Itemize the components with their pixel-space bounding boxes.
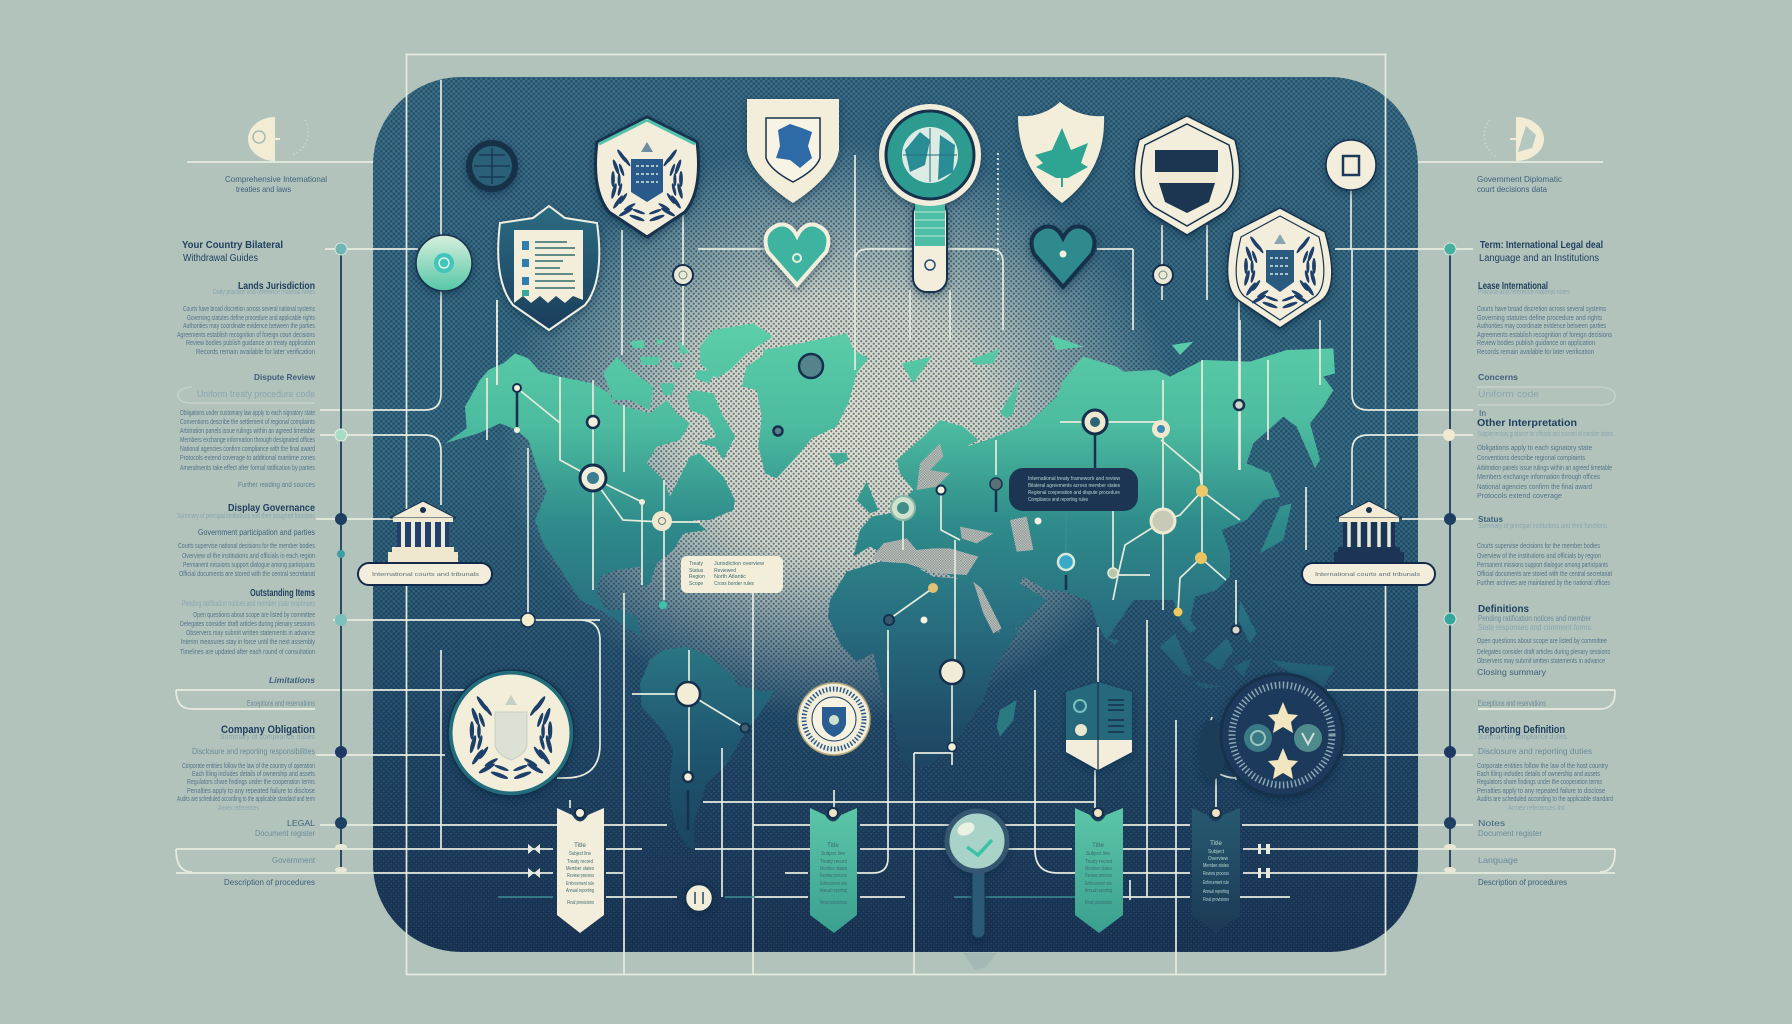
text: right definitions block: Delegates consider draft articles during plenary sessions [1477, 647, 1610, 656]
text: right international block: Review bodies publish guidance on application [1477, 338, 1595, 347]
text: right obligations block: Each filing includes details of ownership and assets [1477, 769, 1600, 778]
callout: cream map note: Region [689, 574, 705, 580]
connector lines [176, 54, 1615, 975]
text: right definitions block [1477, 604, 1610, 677]
text: left dispute block: Uniform treaty procedure code [197, 389, 315, 399]
text: left display governance block: Display Governance [228, 503, 315, 514]
text: left footer notes: Description of procedures [224, 877, 315, 887]
text: left outstanding block [180, 588, 315, 656]
text: right status block: Permanent missions support dialogue among participants [1477, 560, 1608, 569]
text: left footer notes: LEGAL [287, 818, 315, 828]
callout: cream map note: Reviewed [714, 568, 736, 574]
icon: half seal left [248, 117, 308, 161]
tag: teal left [810, 808, 857, 933]
text: right column header [1477, 174, 1563, 194]
map: South America [640, 647, 775, 850]
text: left jurisdiction block: Authorities may coordinate evidence between the parties [183, 321, 315, 330]
text: left outstanding block: Observers may submit written statements in advance [186, 628, 315, 637]
text: left company obligation block: Regulators share findings under the cooperation terms [187, 777, 315, 786]
map: islands [857, 335, 1335, 688]
icon: round stamp [798, 683, 870, 755]
tag: teal right: Subject line [1086, 851, 1110, 857]
text: left jurisdiction block [177, 281, 315, 356]
text: right international block: Agreements establish recognition of foreign decisions [1477, 330, 1612, 339]
text: right concerns block: Other Interpretation [1477, 418, 1577, 429]
callout: cream map note: Treaty [689, 561, 703, 567]
text: right concerns block: Concerns [1478, 372, 1518, 382]
text: right heading: Language and an Institutions [1479, 253, 1599, 264]
tag: cream: Review process [567, 873, 594, 879]
map pins [513, 354, 1244, 782]
text: left dispute block: Conventions describe the settlement of regional complaints [180, 417, 315, 426]
map: Eurasia and Africa [828, 335, 1335, 770]
text: left jurisdiction block: Records remain available for later verification [196, 347, 315, 356]
text: right international block: Governing statutes define procedure and rights [1477, 313, 1602, 322]
callout: dark map note: Compliance and reporting rules [1028, 497, 1088, 503]
tag: dark: Review process [1203, 871, 1229, 877]
text: right heading [1479, 240, 1603, 264]
text: left jurisdiction block: Courts have broad discretion across several national systems [183, 304, 315, 313]
tag: teal left: Subject line [821, 851, 845, 857]
text: right footer notes: Notes [1478, 818, 1505, 828]
tag: cream: Final provisions [567, 900, 594, 906]
text: left limitations: Exceptions and reservations [247, 699, 315, 708]
tag: cream: Treaty record [567, 859, 593, 865]
text: left heading: Your Country Bilateral [182, 240, 283, 251]
text: left display governance block: Official documents are stored with the central secretariat [179, 569, 316, 578]
text: right status block: Summary of principal institutions and their functions [1478, 523, 1607, 530]
pills [176, 690, 1615, 872]
text: right definitions block: Observers may submit written statements in advance [1477, 656, 1605, 665]
map: Iceland [828, 453, 848, 466]
text: right status block: Overview of the institutions and officials by region [1477, 551, 1601, 560]
text: right definitions block: State responses and comment forms [1478, 623, 1591, 632]
text: left dispute block: National agencies confirm compliance with the final award [180, 444, 315, 453]
text: right definitions block: Pending ratification notices and member [1478, 614, 1591, 623]
outer frame [406, 54, 1386, 974]
text: right definitions block: Open questions about scope are listed by committee [1477, 636, 1607, 645]
text: right footer notes: Language [1478, 855, 1518, 865]
text: left outstanding block: Pending ratification notices and member state responses [182, 599, 315, 608]
tag: dark [1192, 808, 1240, 933]
text: right footer notes: Description of procedures [1478, 877, 1567, 887]
tag: cream: Annual reporting [566, 888, 594, 894]
text: left outstanding block: Delegates consider draft articles during plenary sessions [180, 619, 315, 628]
text: left company obligation block: Annex references [218, 805, 259, 812]
text: right heading: Term: International Legal deal [1480, 240, 1603, 251]
icon: bottom node [685, 884, 713, 912]
text: right concerns block: Protocols extend coverage [1477, 491, 1562, 500]
callout: dark map note: International treaty framework and review [1028, 476, 1120, 482]
text: right international block: Authorities may coordinate evidence between parties [1477, 321, 1606, 330]
tag: teal right: Annual reporting [1085, 888, 1112, 894]
text: right definitions block: Closing summary [1477, 667, 1547, 677]
text: left dispute block: Arbitration panels issue rulings within an agreed timetable [180, 426, 315, 435]
icon: laurel seal [448, 670, 574, 796]
text: left jurisdiction block: Daily practice and reference material notes [213, 289, 315, 296]
icon: half seal right [1484, 117, 1544, 161]
text: right international block: Practice and reference material notes [1478, 289, 1570, 296]
icon: dark heart [1032, 226, 1094, 287]
text: right footer notes: Document register [1478, 828, 1542, 838]
tag: cream: Member states [566, 866, 594, 872]
callout: cream map note: Jurisdiction overview [714, 561, 764, 567]
text: left dispute block: Further reading and sources [238, 482, 315, 489]
icon: star badge [1198, 674, 1343, 796]
text: right obligations block: Regulators share findings under the cooperation terms [1477, 777, 1602, 786]
tag: teal left: Member states [820, 866, 847, 872]
text: right concerns block: Members exchange information through offices [1477, 472, 1600, 481]
text: left company obligation block: Each filing includes details of ownership and assets [192, 769, 315, 778]
vertical connectors [497, 150, 1352, 975]
text: right concerns block: Obligations apply to each signatory state [1477, 443, 1592, 452]
icon: document shield [498, 206, 599, 330]
text: left heading: Withdrawal Guides [183, 253, 258, 264]
tag: teal right: Treaty record [1085, 859, 1112, 865]
tag: cream: Subject line [569, 851, 591, 857]
text: left company obligation block: Penalties apply to any repeated failure to disclose [187, 786, 315, 795]
text: left footer notes: Government [272, 855, 316, 865]
panel: world map board [373, 77, 1418, 952]
thick dark connectors [517, 392, 1095, 830]
text: left display governance block: Permanent missions support dialogue among participants [183, 560, 315, 569]
label pill left: International courts and tribunals [372, 572, 480, 578]
icon: mint seal button [416, 235, 472, 291]
tag: dark: Enforcement rule [1203, 880, 1229, 886]
arrow markers [528, 844, 1270, 878]
text: left dispute block: Obligations under customary law apply to each signatory state [180, 408, 315, 417]
tag: teal right: Final provisions [1085, 900, 1112, 906]
text: right status block: Courts supervise decisions for the member bodies [1477, 541, 1600, 550]
tag: dark: Overview [1208, 856, 1228, 862]
icon: courthouse right [1334, 501, 1404, 562]
left timeline [335, 243, 347, 873]
text: right international block: Lease International [1478, 281, 1548, 292]
text: right column header: Government Diplomatic [1477, 174, 1563, 184]
icon: maple leaf shield [1018, 102, 1104, 203]
map: Madagascar [997, 700, 1017, 737]
text: left display governance block: Courts supervise national decisions for the member bodies [178, 541, 315, 550]
callout: dark map note: Bilateral agreements across member states [1028, 483, 1120, 489]
icon: small node left [673, 265, 693, 285]
text: left outstanding block: Open questions about scope are listed by committee [193, 610, 315, 619]
text: left limitations: Limitations [269, 675, 315, 685]
text: left outstanding block: Outstanding Items [250, 588, 315, 599]
tag: dark: Title [1210, 841, 1223, 847]
icon: crest shield right [1228, 208, 1332, 328]
tag: dark: Member states [1203, 863, 1229, 869]
callout: cream map note: Scope [689, 581, 703, 587]
grid connectors [176, 80, 1615, 897]
text: right obligations block: Penalties apply to any repeated failure to disclose [1477, 786, 1605, 795]
text: right definitions block: Definitions [1478, 604, 1529, 615]
text: right obligations block: Summary of compliance duties [1478, 734, 1567, 741]
text: left heading [182, 240, 283, 264]
callout: dark map note [1009, 468, 1138, 511]
tag: teal left: Review process [820, 873, 847, 879]
text: left display governance block: Summary of principal institutions and their assigned functions [177, 513, 315, 520]
tag: teal left: Treaty record [820, 859, 847, 865]
text: left column header: Comprehensive International [225, 174, 327, 184]
callout: cream map note [681, 556, 783, 593]
text: left display governance block: Government participation and parties [198, 527, 315, 537]
text: right concerns block: In [1479, 408, 1486, 418]
text: right footer notes [1478, 818, 1567, 887]
text: left dispute block: Amendments take effect after formal ratification by parties [180, 463, 315, 472]
callout: dark map note: Regional cooperation and dispute procedure [1028, 490, 1120, 496]
callout: cream map note: Cross border rules [714, 581, 754, 587]
text: right concerns block: Conventions describe regional complaints [1477, 453, 1585, 462]
tag: teal right: Review process [1085, 873, 1112, 879]
tag: dark: Annual reporting [1203, 889, 1229, 895]
icon: teal heart [766, 224, 828, 285]
text: left outstanding block: Timelines are updated after each round of consultation [180, 647, 315, 656]
text: right international block [1477, 281, 1612, 356]
text: right obligations block: Reporting Definition [1478, 724, 1565, 736]
text: right obligations block: Audits are scheduled according to the applicable standard [1477, 794, 1613, 803]
text: right obligations block [1477, 724, 1613, 812]
text: right concerns block: National agencies confirm the final award [1477, 482, 1592, 491]
label pill left [358, 563, 492, 585]
timeline nodes [1443, 243, 1456, 873]
text: right obligations block: Annex references list [1508, 805, 1565, 812]
text: right international block: Records remain available for later verification [1477, 347, 1594, 356]
tag: teal left: Enforcement rule [820, 881, 847, 887]
text: right status block: Status [1478, 514, 1503, 524]
text: left company obligation block: Corporate entities follow the law of the country of operation [182, 761, 315, 770]
icon: courthouse left [388, 501, 458, 562]
text: left dispute block: Members exchange information through designated offices [180, 435, 315, 444]
icon: crest shield with wreath [596, 117, 698, 237]
icon: square button [1326, 140, 1376, 190]
icon: small node right [1153, 265, 1173, 285]
text: left display governance block: Overview of the institutions and officials in each region [182, 551, 315, 560]
map: North America [445, 353, 735, 637]
text: left column header [225, 174, 327, 194]
map connectors [487, 300, 700, 620]
map: inland seas [872, 443, 1033, 633]
text: right status block [1477, 514, 1613, 587]
tag: teal left: Title [827, 843, 840, 849]
timeline nodes [335, 243, 347, 873]
text: left jurisdiction block: Governing statutes define procedure and applicable rights [187, 313, 315, 322]
text: left jurisdiction block: Agreements establish recognition of foreign court decisions [177, 330, 315, 339]
text: left display governance block [177, 503, 316, 578]
text: left outstanding block: Interim measures stay in force until the next assembly [181, 637, 315, 646]
callout: cream map note: Status [689, 568, 704, 574]
text: left company obligation block [177, 724, 315, 812]
tag: dark: Final provisions [1203, 897, 1229, 903]
text: left company obligation block: Audits are scheduled according to the applicable standard and term [177, 794, 315, 803]
text: right concerns block: Uniform code [1478, 389, 1539, 399]
tag: teal left: Annual reporting [820, 888, 847, 894]
tag: cream [557, 808, 604, 933]
tag: dark: Subject [1208, 849, 1225, 855]
text: left dispute block [180, 372, 315, 489]
icon: shield book [1066, 682, 1132, 770]
text: left footer notes [224, 818, 316, 887]
map: Africa [828, 562, 1020, 770]
text: left dispute block: Protocols extend coverage to additional maritime zones [180, 453, 315, 462]
icon: magnifier check [947, 811, 1007, 938]
map: Arctic islands [603, 323, 773, 460]
text: right concerns block: Arbitration panels issue rulings within an agreed timetable [1477, 463, 1612, 472]
text: left limitations [247, 675, 315, 708]
text: right international block: Courts have broad discretion across several systems [1477, 304, 1606, 313]
tag: cream: Title [574, 843, 587, 849]
text: right obligations block: Disclosure and reporting duties [1478, 746, 1592, 756]
world map [445, 323, 868, 850]
text: right obligations block: Corporate entities follow the law of the host country [1477, 761, 1608, 770]
tag: teal right: Enforcement rule [1085, 881, 1112, 887]
text: right column header: court decisions data [1477, 184, 1547, 194]
text: left dispute block: Dispute Review [254, 372, 315, 382]
icon: pale shield with lion crest [747, 99, 839, 203]
tag: teal right: Title [1092, 843, 1105, 849]
text: left company obligation block: Company Obligation [221, 724, 315, 736]
tag: teal right [1075, 808, 1123, 933]
text: left jurisdiction block: Review bodies publish guidance on treaty application [186, 338, 315, 347]
text: right limitations: Exceptions and reservations [1478, 699, 1546, 708]
tag: teal right: Member states [1085, 866, 1112, 872]
tag: teal left: Final provisions [820, 900, 847, 906]
map: Eurasia [853, 348, 1335, 640]
label pill right: International courts and tribunals [1315, 572, 1421, 578]
tag: cream: Enforcement rule [566, 881, 594, 887]
map: Greenland [742, 333, 868, 478]
text: left footer notes: Document register [255, 828, 315, 838]
label pill right [1302, 563, 1435, 585]
shadow below panel [963, 953, 997, 970]
text: left column header: treaties and laws [236, 184, 291, 194]
text: left company obligation block: Summary of compliance duties [220, 734, 315, 741]
text: right status block: Further archives are maintained by the national offices [1477, 578, 1610, 587]
text: right concerns block [1477, 372, 1613, 500]
callout: cream map note: North Atlantic [714, 574, 747, 580]
icon: magnifier badge [879, 104, 981, 292]
teal connectors [498, 511, 1075, 897]
icon: bar shield [1134, 116, 1240, 235]
text: right status block: Official documents are stored with the central secretariat [1477, 569, 1613, 578]
text: left company obligation block: Disclosure and reporting responsibilities [192, 746, 315, 756]
right timeline [1443, 243, 1456, 873]
text: right concerns block: Supplementary guidance for officials and counsel of member states [1478, 431, 1613, 438]
text: left jurisdiction block: Lands Jurisdiction [238, 281, 315, 292]
icon: globe badge [466, 140, 518, 192]
